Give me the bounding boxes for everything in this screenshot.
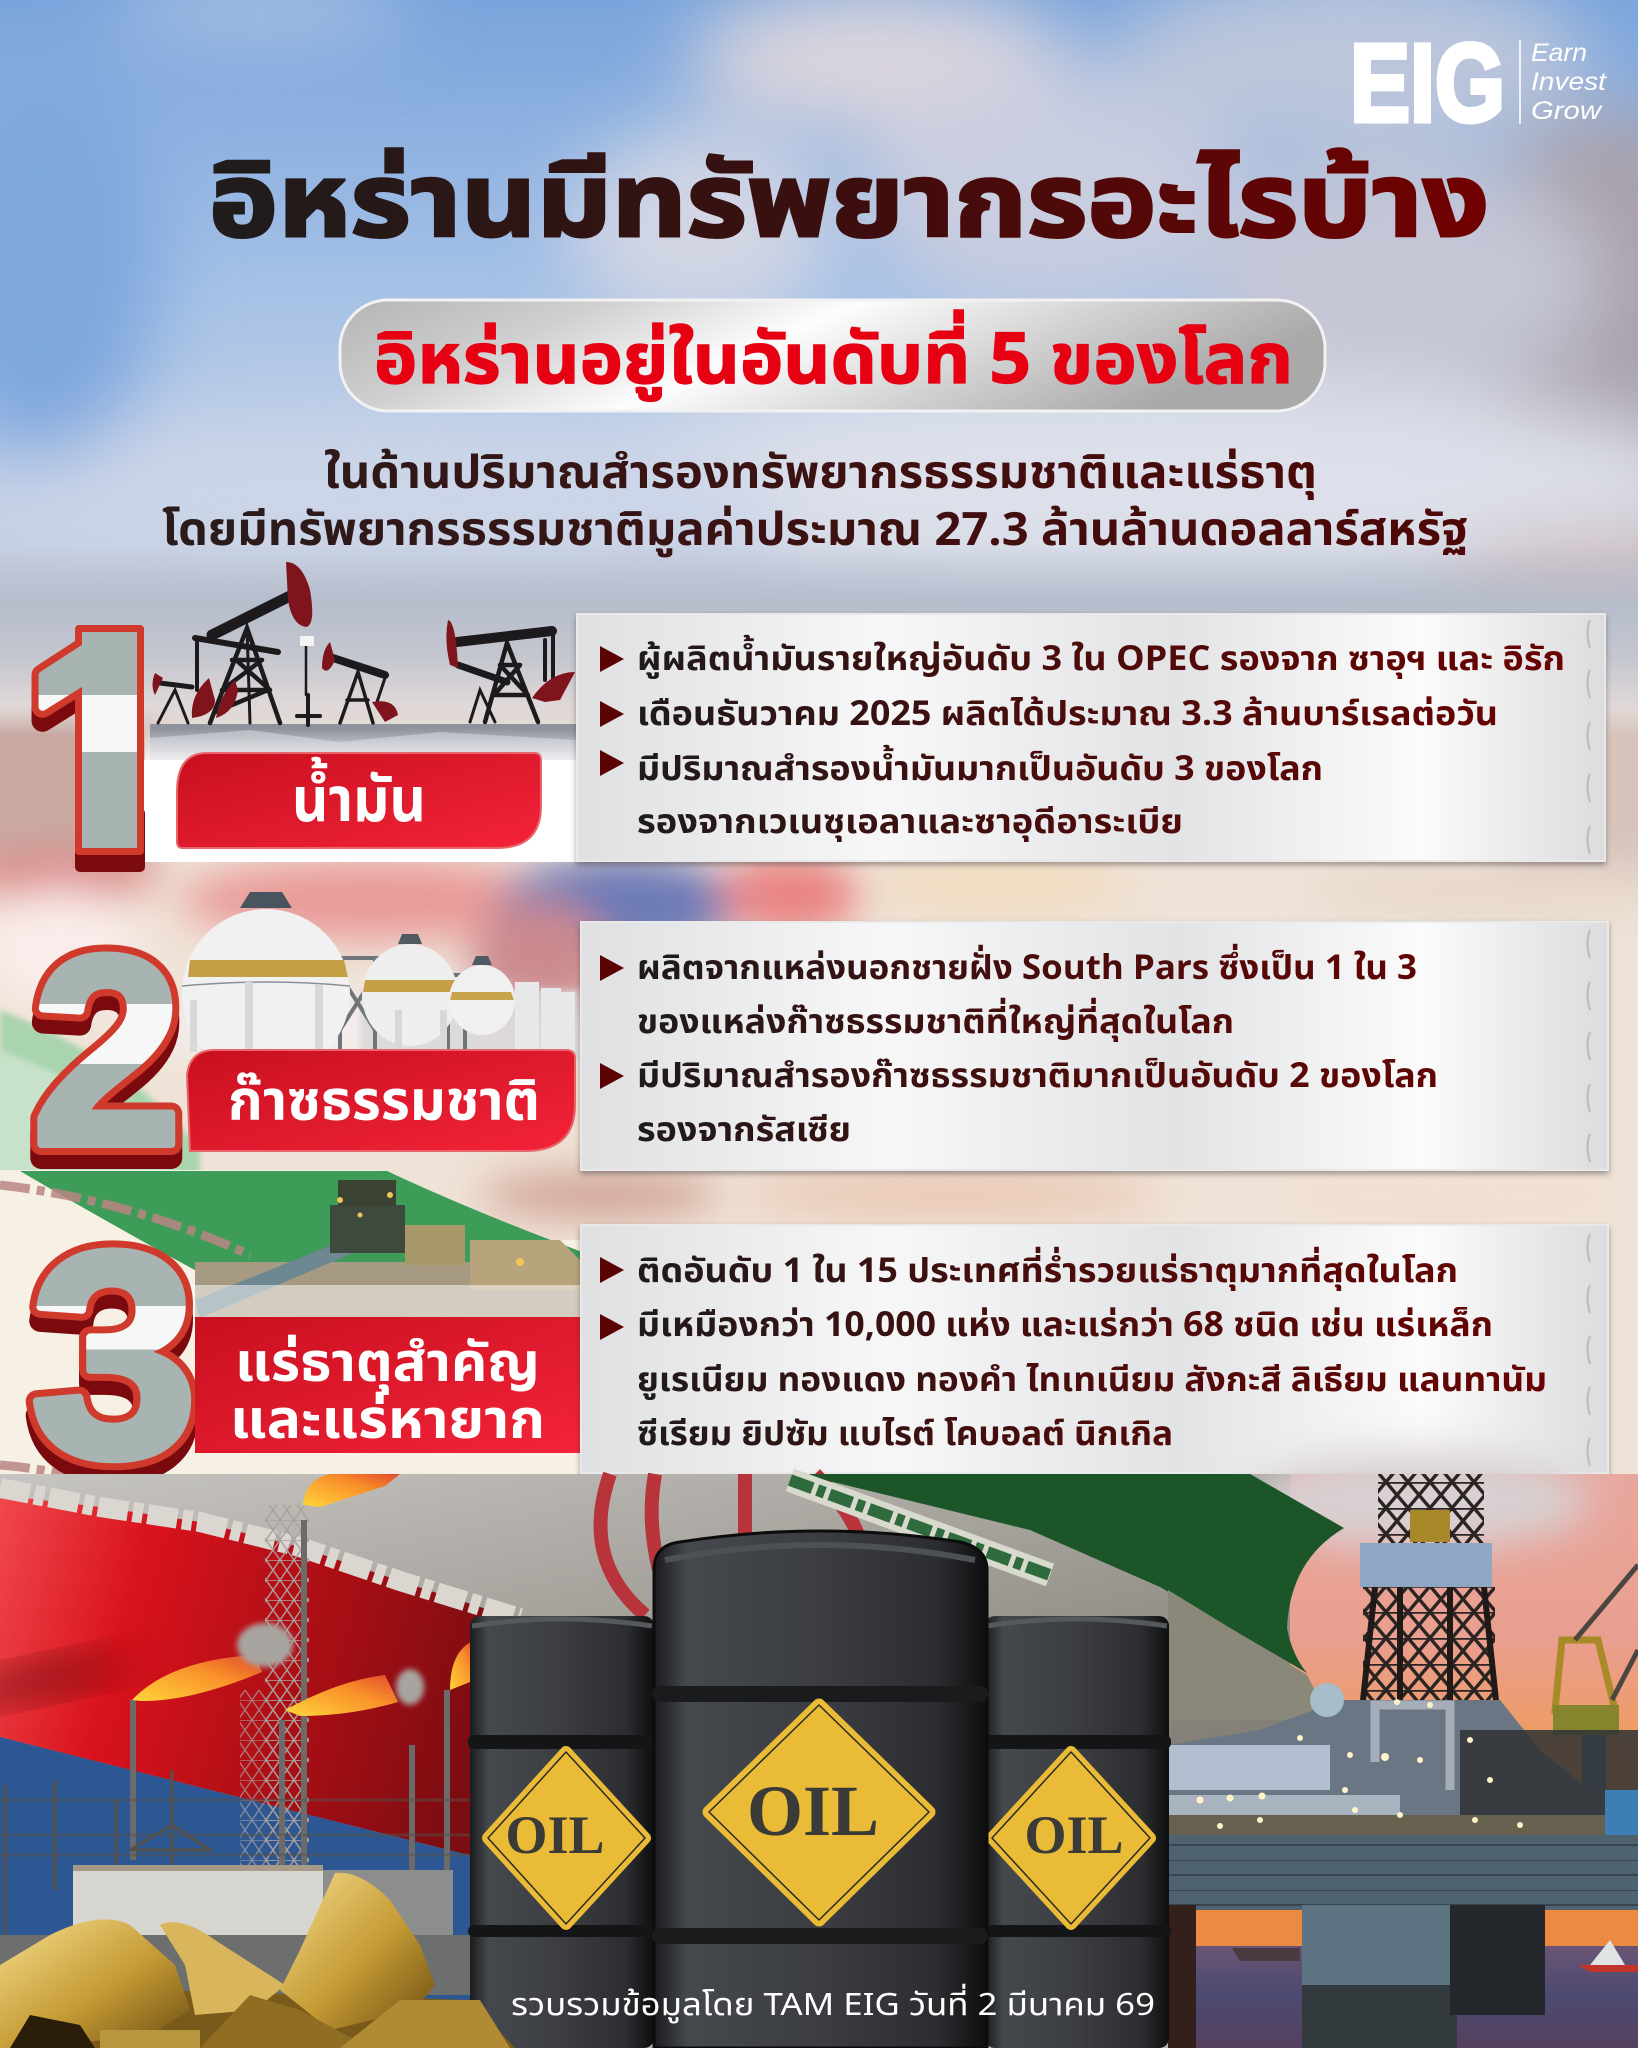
label text: ก๊าซธรรมชาติ — [228, 1062, 540, 1146]
number 1 — [32, 625, 145, 872]
bullets — [600, 955, 624, 1089]
card 3 — [581, 1225, 1608, 1473]
deck lights — [1196, 1699, 1523, 1829]
card text: ซีเรียม ยิปซัม แบไรต์ โคบอลต์ นิกเกิล — [637, 1410, 1173, 1461]
logo tagline: Invest — [1531, 68, 1607, 96]
hull — [1168, 1835, 1638, 1910]
number 1: 1 — [23, 580, 185, 907]
label text: และแร่หายาก — [230, 1382, 545, 1463]
card text: มีปริมาณสำรองก๊าซธรรมชาติมากเป็นอันดับ 2 ของโลก — [637, 1052, 1438, 1103]
barrel: center — [652, 1531, 988, 2048]
photo: oil pump jacks — [0, 545, 1638, 862]
binder rings — [1588, 620, 1590, 854]
number 3: 3 — [30, 1206, 198, 1533]
section 2: natural gas photo — [182, 892, 580, 1077]
label: strategic minerals — [195, 1317, 581, 1463]
bullets — [600, 1257, 624, 1340]
sky at right — [1290, 1474, 1638, 1944]
flames — [132, 1474, 475, 1716]
number 3: 3 — [30, 1192, 198, 1519]
flag green stripe — [800, 1474, 1344, 1673]
card text: ยูเรเนียม ทองแดง ทองคำ ไทเทเนียม สังกะสี ลิเธียม แลนทานัม — [637, 1356, 1547, 1407]
flag script band — [0, 1488, 520, 1618]
number 1: 1 — [23, 594, 185, 921]
pill text: อิหร่านอยู่ในอันดับที่ 5 ของโลก — [374, 309, 1293, 415]
oil diamond — [992, 1752, 1150, 1924]
intro text: ในด้านปริมาณสำรองทรัพยากรธรรมชาติและแร่ธาตุ — [324, 439, 1317, 509]
oil diamond — [488, 1752, 645, 1924]
oil label: OIL — [747, 1771, 879, 1851]
logo tagline: Earn — [1531, 39, 1587, 67]
card text — [637, 943, 1438, 1157]
hull columns — [1168, 1905, 1196, 2048]
card text: มีปริมาณสำรองน้ำมันมากเป็นอันดับ 3 ของโลก — [637, 744, 1323, 796]
smoke — [237, 1623, 424, 1705]
crane — [1555, 1640, 1615, 1710]
card text: รองจากรัสเซีย — [637, 1106, 851, 1157]
flag red stripe — [0, 1495, 520, 1868]
scene: gold nuggets — [0, 1873, 515, 2048]
barrel: right — [983, 1616, 1171, 2048]
sea — [1168, 1945, 1638, 2048]
label text — [230, 1325, 545, 1463]
logo mark: EIG — [1350, 22, 1505, 145]
title: อิหร่านมีทรัพยากรอะไรบ้าง — [209, 128, 1489, 282]
scene: offshore oil rig — [1168, 1474, 1638, 2048]
card text: เดือนธันวาคม 2025 ผลิตได้ประมาณ 3.3 ล้านบาร์เรลต่อวัน — [637, 690, 1498, 741]
bottom scene: Iranian flag — [0, 1450, 1638, 2048]
card text: ผู้ผลิตน้ำมันรายใหญ่อันดับ 3 ใน OPEC รองจาก ซาอุฯ และ อิรัก — [637, 634, 1565, 686]
section 1: oil — [0, 545, 1638, 862]
card text: รองจากเวเนซุเอลาและซาอุดีอาระเบีย — [637, 798, 1183, 849]
number 2: 2 — [32, 901, 182, 1202]
label: oil — [177, 753, 541, 849]
flag blue stripe — [0, 1737, 520, 2048]
card 1 — [577, 614, 1605, 861]
card text — [637, 634, 1565, 849]
label text: แร่ธาตุสำคัญ — [235, 1325, 540, 1406]
subtitle pill — [340, 300, 1325, 415]
intro text — [162, 439, 1468, 566]
logo: EIG Earn Invest Grow — [1350, 22, 1607, 145]
card text: ติดอันดับ 1 ใน 15 ประเทศที่ร่ำรวยแร่ธาตุมากที่สุดในโลก — [637, 1246, 1458, 1298]
label text: น้ำมัน — [292, 755, 426, 849]
oil label: OIL — [505, 1805, 605, 1865]
bullets — [600, 646, 624, 776]
card text — [637, 1246, 1547, 1461]
platform deck — [1168, 1700, 1638, 1840]
oil label: OIL — [1024, 1805, 1124, 1865]
derrick — [1378, 1474, 1484, 1549]
card text: มีเหมืองกว่า 10,000 แห่ง และแร่กว่า 68 ชนิด เช่น แร่เหล็ก — [637, 1301, 1493, 1352]
background: blurred middle band — [0, 620, 1638, 1480]
logo tagline: Grow — [1531, 97, 1603, 125]
background: sky and blurred clouds — [0, 0, 1638, 700]
intro text: โดยมีทรัพยากรธรรมชาติมูลค่าประมาณ 27.3 ล้านล้านดอลลาร์สหรัฐ — [162, 496, 1468, 566]
scene: refinery and flares — [0, 1474, 475, 1995]
flag emblem stripes — [601, 1474, 860, 1615]
source footer: รวบรวมข้อมูลโดย TAM EIG วันที่ 2 มีนาคม 69 — [511, 1982, 1155, 2029]
number 3: 3 — [30, 1192, 198, 1519]
card text: ผลิตจากแหล่งนอกชายฝั่ง South Pars ซึ่งเป็น 1 ใน 3 — [637, 943, 1417, 995]
section 3: mining plant photo — [190, 1180, 582, 1320]
card text: ของแหล่งก๊าซธรรมชาติที่ใหญ่ที่สุดในโลก — [637, 997, 1234, 1049]
number 2: 2 — [32, 915, 182, 1216]
barrel: left — [468, 1616, 656, 2048]
oil diamond — [709, 1705, 929, 1920]
logo tagline — [1531, 39, 1607, 125]
number 1: 1 — [23, 580, 185, 907]
card 2 — [581, 922, 1608, 1170]
label: natural gas — [187, 1050, 575, 1151]
number 2: 2 — [32, 901, 182, 1202]
binder rings — [1588, 1234, 1590, 1466]
ships — [1232, 1948, 1300, 1961]
binder rings — [1588, 930, 1590, 1162]
